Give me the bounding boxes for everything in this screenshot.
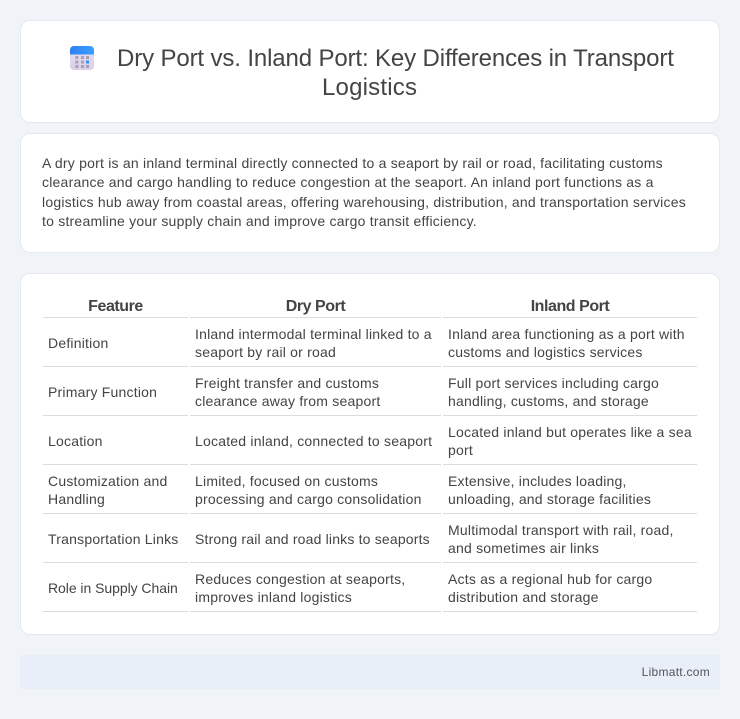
- intro text: clearance and cargo handling to reduce congestion at the seaport. An inland port functions as a: [42, 174, 654, 190]
- row: Definition: Inland area functioning as a port with: [448, 326, 685, 342]
- panel: introduction: [20, 133, 720, 253]
- row: Role in Supply Chain: Role in Supply Chain: [48, 580, 178, 596]
- footer bar: [20, 655, 720, 689]
- row: Definition: Inland intermodal terminal linked to a: [195, 326, 432, 342]
- header: Dry Port: Dry Port: [286, 298, 345, 315]
- row: Customization and Handling: processing and cargo consolidation: [195, 491, 422, 507]
- row: Role in Supply Chain: [48, 571, 652, 605]
- row: Transportation Links: [48, 522, 674, 556]
- row: Primary Function: Full port services including cargo: [448, 375, 659, 391]
- row: Primary Function: Primary Function: [48, 384, 157, 400]
- row: Definition: Definition: [48, 335, 108, 351]
- intro text: logistics hub away from coastal areas, offering warehousing, distribution, and transportation services: [42, 194, 686, 210]
- row: Customization and Handling: Handling: [48, 491, 105, 507]
- title: Logistics: [322, 74, 417, 101]
- row: Primary Function: handling, customs, and storage: [448, 393, 649, 409]
- row: Role in Supply Chain: improves inland logistics: [195, 589, 352, 605]
- panel: title card: [20, 20, 720, 123]
- row: Definition: customs and logistics services: [448, 344, 643, 360]
- row: Customization and Handling: unloading, and storage facilities: [448, 491, 651, 507]
- intro text: to streamline your supply chain and improve cargo transit efficiency.: [42, 213, 477, 229]
- row: Primary Function: Freight transfer and customs: [195, 375, 379, 391]
- row: Location: Located inland but operates like a sea: [448, 424, 692, 440]
- row: Location: Location: [48, 433, 103, 449]
- row: Location: Located inland, connected to seaport: [195, 433, 432, 449]
- panel: comparison table: [20, 273, 720, 635]
- title: Dry Port vs. Inland Port: Key Differences in Transport: [117, 45, 674, 72]
- row: Definition: seaport by rail or road: [195, 344, 336, 360]
- row: Transportation Links: Multimodal transport with rail, road,: [448, 522, 674, 538]
- row: Location: port: [448, 442, 473, 458]
- row: Role in Supply Chain: Reduces congestion at seaports,: [195, 571, 405, 587]
- row: Role in Supply Chain: Acts as a regional hub for cargo: [448, 571, 652, 587]
- row: Role in Supply Chain: distribution and storage: [448, 589, 599, 605]
- table header: [88, 298, 610, 315]
- icon: calendar: [70, 46, 94, 70]
- header: Inland Port: Inland Port: [531, 298, 609, 315]
- row: Primary Function: [48, 375, 659, 409]
- row: Transportation Links: and sometimes air links: [448, 540, 599, 556]
- row: Transportation Links: Strong rail and road links to seaports: [195, 531, 430, 547]
- title: [117, 45, 674, 101]
- row: Transportation Links: Transportation Links: [48, 531, 179, 547]
- intro text: [42, 155, 686, 229]
- row: Customization and Handling: Extensive, includes loading,: [448, 473, 627, 489]
- footer text: Libmatt.com: [642, 665, 710, 679]
- row: Customization and Handling: [48, 473, 651, 507]
- row: Definition: [48, 326, 685, 360]
- row: Customization and Handling: Customization and: [48, 473, 168, 489]
- intro text: A dry port is an inland terminal directly connected to a seaport by rail or road, facilitating customs: [42, 155, 663, 171]
- row: Customization and Handling: Limited, focused on customs: [195, 473, 378, 489]
- header: Feature: Feature: [88, 298, 143, 315]
- row: Location: [48, 424, 692, 458]
- row: Primary Function: clearance away from seaport: [195, 393, 380, 409]
